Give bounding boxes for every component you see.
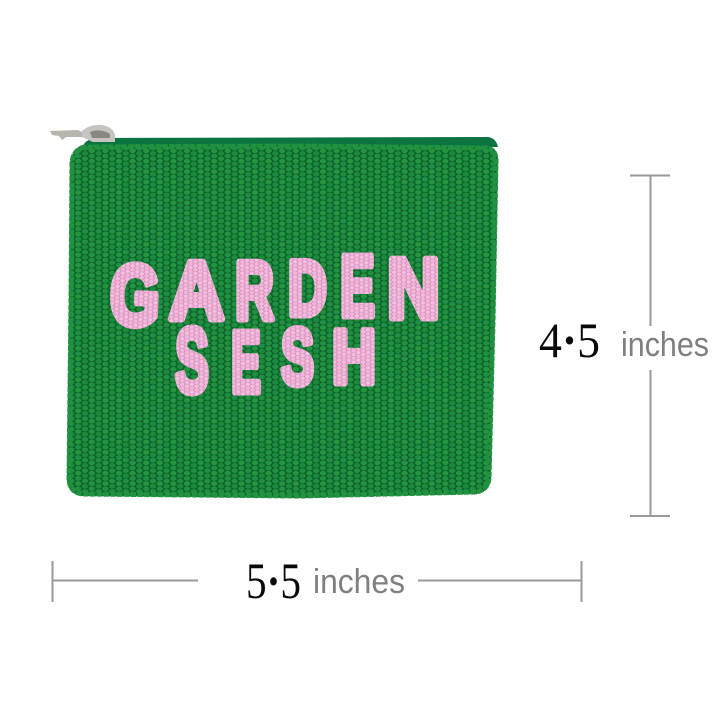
zipper tape [84, 137, 498, 147]
height dimension: 4.5 inches [539, 176, 709, 516]
zipper pull [50, 125, 115, 142]
word: GARDEN: N [387, 242, 440, 337]
word: GARDEN: G [108, 247, 162, 345]
word: GARDEN: A [169, 244, 224, 337]
word: SESH: E [231, 314, 261, 411]
word: GARDEN: D [288, 244, 327, 332]
word: SESH [175, 310, 376, 412]
width bracket [52, 561, 582, 602]
word: SESH: H [332, 315, 376, 400]
width dimension: 5.5 inches [52, 554, 582, 610]
width value: 5·5 [246, 554, 301, 610]
word: SESH: S [175, 310, 209, 412]
beaded green pouch [50, 125, 498, 498]
beaded edge [69, 146, 496, 496]
width unit: inches [313, 563, 405, 601]
height value: 4·5 [539, 312, 600, 368]
word: GARDEN [108, 238, 440, 345]
word: SESH: S [281, 312, 314, 401]
height bracket [630, 176, 670, 516]
word: GARDEN: E [340, 238, 375, 335]
pouch body [67, 144, 498, 498]
pink beaded lettering [108, 238, 440, 412]
word: GARDEN: R [235, 244, 274, 337]
height unit: inches [621, 326, 709, 364]
